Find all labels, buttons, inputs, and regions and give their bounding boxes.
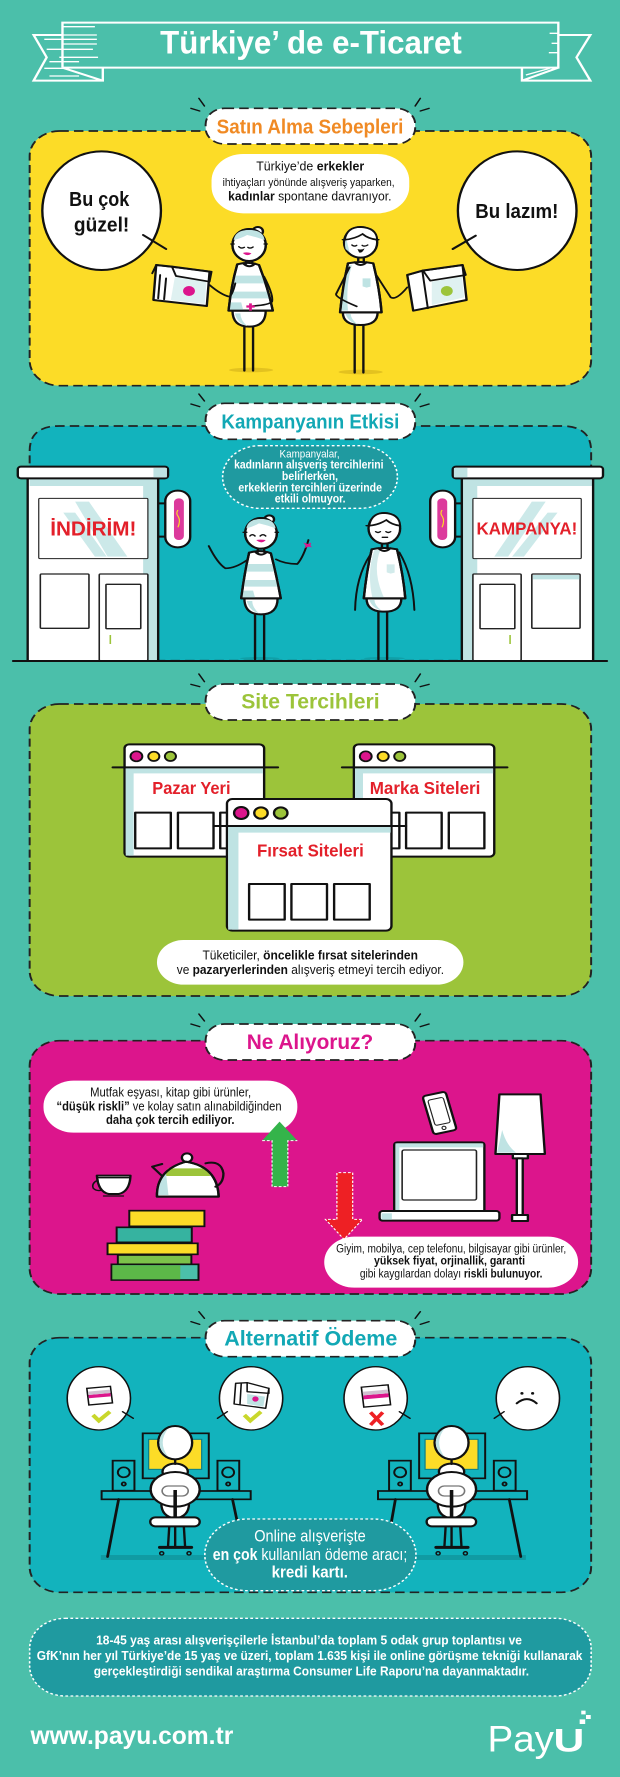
happy woman	[209, 515, 312, 660]
callout text: etkili olmuyor.	[275, 492, 346, 505]
box left	[152, 265, 212, 306]
heading: Ne Alıyoruz?	[191, 1014, 429, 1060]
callout text	[205, 1519, 416, 1591]
browser: Fırsat Siteleri: Fırsat Siteleri	[257, 841, 364, 861]
browser: Pazar Yeri: Pazar Yeri	[152, 779, 231, 799]
heading: Satın Alma Sebepleri: Satın Alma Sebepleri	[217, 114, 403, 138]
icon: lamp	[495, 1094, 545, 1221]
heading: Satın Alma Sebepleri	[191, 98, 429, 144]
callout text: en çok kullanılan ödeme aracı;	[213, 1545, 407, 1564]
callout: high risk	[324, 1237, 578, 1288]
website url: www.payu.com.tr	[30, 1721, 233, 1749]
panel: Kampanyanın Etkisi	[13, 394, 607, 661]
callout: low risk: “düşük riskli” ve kolay satın alınabildiğinden	[57, 1098, 282, 1113]
panel: Satın Alma Sebepleri	[30, 98, 591, 386]
title text: Türkiye’ de e-Ticaret	[160, 24, 462, 61]
icon: phone	[422, 1092, 457, 1135]
logo: PayU: Pay	[488, 1718, 554, 1760]
ground line	[13, 658, 607, 664]
panel: Ne Alıyoruz?	[30, 1014, 591, 1294]
callout text: erkeklerin tercihleri üzerinde	[238, 480, 382, 494]
callout text	[212, 154, 409, 213]
callout text	[223, 446, 397, 508]
speech bubble left: güzel!	[74, 213, 129, 236]
icon: teacup	[93, 1176, 130, 1196]
arrow up	[262, 1122, 297, 1187]
store right: KAMPANYA!	[476, 519, 577, 539]
callout text: kadınlar spontane davranıyor.	[228, 190, 391, 204]
speech bubble left	[42, 151, 166, 270]
person at desk left	[102, 1426, 251, 1557]
browser: Marka Siteleri: Marka Siteleri	[370, 779, 480, 799]
heading: Site Tercihleri	[191, 674, 429, 720]
browser: Marka Siteleri	[342, 744, 507, 857]
callout text: kredi kartı.	[272, 1563, 348, 1581]
panel: Site Tercihleri	[30, 674, 591, 996]
logo: PayU	[488, 1711, 591, 1760]
store left: İNDİRİM!	[50, 516, 136, 540]
callout: low risk: Mutfak eşyası, kitap gibi ürünler,	[90, 1085, 251, 1099]
callout: high risk: gibi kaygılardan dolayı riskli bulunuyor.	[360, 1266, 543, 1280]
logo: PayU: U	[554, 1722, 584, 1759]
icon: teapot	[152, 1153, 223, 1197]
callout text: Türkiye’de erkekler	[256, 160, 364, 174]
store right	[430, 467, 603, 661]
callout text: ve pazaryerlerinden alışveriş etmeyi tercih ediyor.	[177, 963, 444, 978]
footnote panel: 18-45 yaş arası alışverişçilerle İstanbul’da toplam 5 odak grup toplantısı ve	[96, 1632, 522, 1647]
callout: low risk	[43, 1081, 297, 1133]
callout: low risk: daha çok tercih ediliyor.	[106, 1112, 234, 1127]
footnote panel	[30, 1618, 591, 1696]
bubble: sad face	[494, 1367, 560, 1430]
icon: stack of books	[108, 1211, 204, 1280]
speech bubble left: Bu çok	[69, 188, 130, 211]
heading: Site Tercihleri: Site Tercihleri	[241, 689, 380, 713]
heading: Kampanyanın Etkisi: Kampanyanın Etkisi	[221, 409, 399, 433]
heading: Alternatif Ödeme: Alternatif Ödeme	[224, 1326, 397, 1350]
heading: Ne Alıyoruz?: Ne Alıyoruz?	[247, 1030, 373, 1054]
indifferent man	[355, 513, 414, 660]
person at desk right	[378, 1426, 527, 1557]
panel: Alternatif Ödeme	[30, 1312, 591, 1592]
callout: high risk: yüksek fiyat, orjinallik, garanti	[374, 1253, 525, 1267]
title banner	[34, 23, 590, 81]
callout text: ihtiyaçları yönünde alışveriş yaparken,	[223, 176, 395, 189]
box right	[407, 265, 467, 311]
callout text: Tüketiciler, öncelikle fırsat sitelerinden	[202, 948, 418, 963]
callout text: Online alışverişte	[254, 1527, 366, 1545]
woman with box	[210, 227, 273, 372]
bubble: card rejected	[344, 1367, 410, 1430]
browser: Pazar Yeri	[113, 744, 278, 857]
bubble: box accepted	[217, 1367, 283, 1430]
callout text: belirlerken,	[282, 469, 338, 483]
floor shadow	[101, 1555, 526, 1560]
bubble: card accepted	[67, 1367, 133, 1430]
browser: Fırsat Siteleri	[214, 799, 406, 931]
heading: Kampanyanın Etkisi	[191, 394, 429, 439]
callout text	[157, 940, 463, 985]
speech bubble right: Bu lazım!	[475, 200, 558, 223]
store left	[18, 467, 190, 661]
callout text: Kampanyalar,	[280, 447, 340, 460]
heading: Alternatif Ödeme	[191, 1312, 429, 1357]
icon: laptop	[380, 1142, 499, 1221]
speech bubble right	[453, 151, 577, 270]
arrow down	[325, 1173, 363, 1239]
callout text: kadınların alışveriş tercihlerini	[234, 458, 384, 471]
man with box	[336, 227, 407, 374]
